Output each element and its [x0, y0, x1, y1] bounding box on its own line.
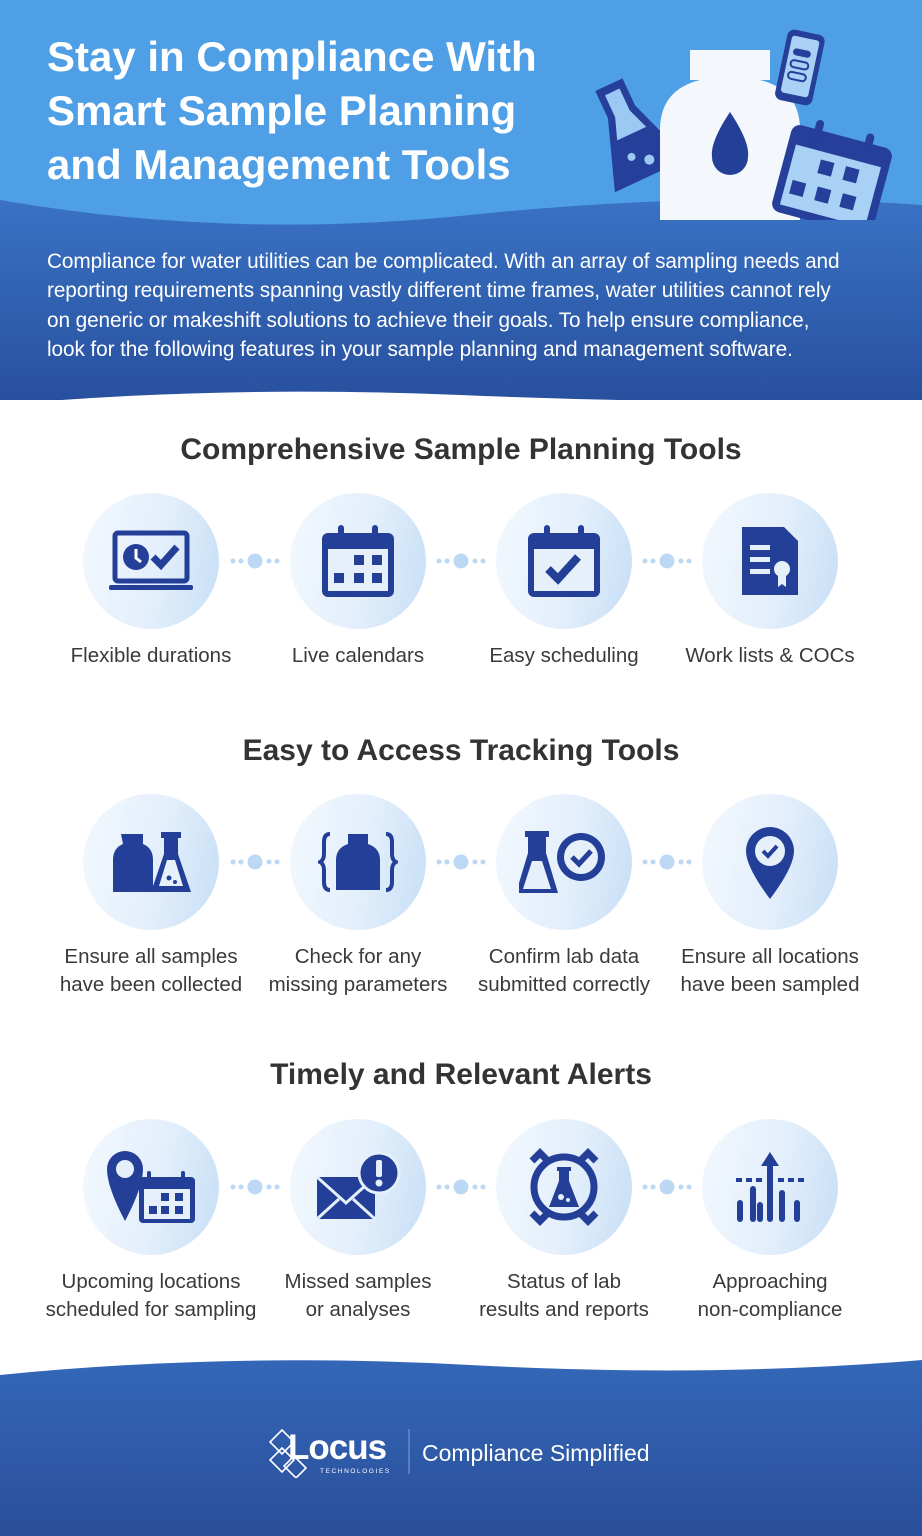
title: and Management Tools: [47, 141, 511, 188]
panel: tracking items: [60, 794, 859, 996]
item: flexible durations: [71, 493, 231, 667]
item: missing parameters: [269, 794, 447, 996]
panel: planning items: [71, 493, 855, 667]
icon: bottle: [660, 50, 800, 220]
item: samples collected: Ensure all samples: [64, 945, 238, 968]
item: samples collected: have been collected: [60, 973, 242, 996]
item: upcoming locations: [46, 1119, 256, 1321]
item: missed samples: Missed samples: [285, 1270, 431, 1293]
item: samples collected: [60, 794, 242, 996]
intro text: on generic or makeshift solutions to achieve their goals. To help ensure compliance,: [47, 309, 809, 332]
footer logo: Compliance Simplified: [422, 1440, 650, 1466]
footer logo: TECHNOLOGIES: [320, 1468, 391, 1475]
heading: alerts: Timely and Relevant Alerts: [270, 1058, 652, 1091]
icon: calendar: [770, 113, 896, 237]
title: [47, 33, 537, 188]
item: approaching non-compliance: Approaching: [712, 1270, 828, 1293]
item: approaching non-compliance: [698, 1119, 842, 1321]
hero illustration: [595, 30, 892, 220]
panel: alert items: [46, 1119, 842, 1321]
intro text: [47, 250, 839, 361]
item: locations sampled: have been sampled: [681, 973, 859, 996]
footer logo: [269, 1428, 650, 1478]
footer logo: Locus: [288, 1428, 387, 1467]
item: approaching non-compliance: non-compliance: [698, 1298, 842, 1321]
item: missed samples: [285, 1119, 431, 1321]
heading: planning: Comprehensive Sample Planning Tools: [180, 433, 742, 466]
icon: phone: [774, 28, 826, 107]
item: easy scheduling: Easy scheduling: [489, 644, 639, 667]
item: lab status: [479, 1119, 649, 1321]
item: upcoming locations: scheduled for sampling: [46, 1298, 256, 1321]
item: live calendars: Live calendars: [292, 644, 424, 667]
intro text: Compliance for water utilities can be complicated. With an array of sampling needs and: [47, 250, 839, 273]
title: Smart Sample Planning: [47, 87, 516, 134]
item: lab data: Confirm lab data: [489, 945, 639, 968]
item: live calendars: [290, 493, 426, 667]
item: missing parameters: Check for any: [295, 945, 421, 968]
item: lab status: results and reports: [479, 1298, 649, 1321]
item: work lists: [685, 493, 855, 667]
icon: flask: [573, 68, 687, 192]
item: flexible durations: Flexible durations: [71, 644, 231, 667]
item: easy scheduling: [489, 493, 639, 667]
item: missed samples: or analyses: [306, 1298, 410, 1321]
intro text: reporting requirements spanning vastly different time frames, water utilities cannot rely: [47, 279, 831, 302]
heading: tracking: Easy to Access Tracking Tools: [243, 734, 679, 767]
title: Stay in Compliance With: [47, 33, 537, 80]
item: locations sampled: [681, 794, 859, 996]
item: locations sampled: Ensure all locations: [681, 945, 859, 968]
item: missing parameters: missing parameters: [269, 973, 447, 996]
intro text: look for the following features in your sample planning and management software.: [47, 338, 793, 361]
item: lab status: Status of lab: [507, 1270, 621, 1293]
item: lab data: submitted correctly: [478, 973, 650, 996]
item: lab data: [478, 794, 650, 996]
item: upcoming locations: Upcoming locations: [62, 1270, 240, 1293]
item: work lists: Work lists & COCs: [685, 644, 855, 667]
